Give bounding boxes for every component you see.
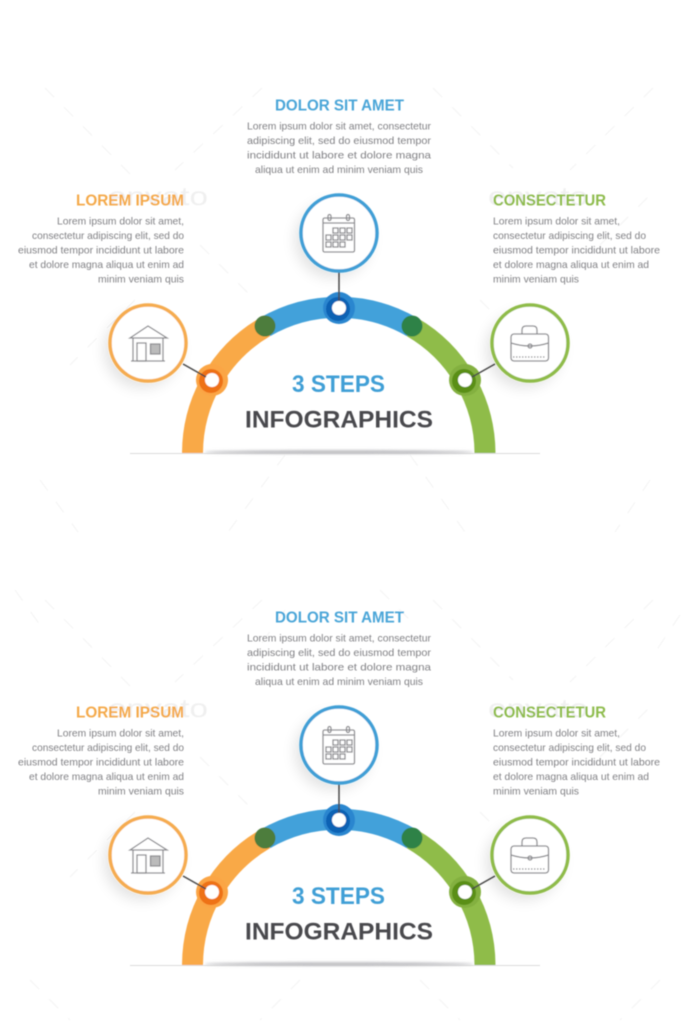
left text block: minim veniam quis (98, 786, 184, 798)
connector: right (472, 876, 495, 889)
center text block: incididunt ut labore et dolore magna (247, 662, 431, 674)
icon: briefcase (511, 326, 548, 361)
left text block: Lorem ipsum dolor sit amet, (57, 728, 184, 740)
center text block (247, 634, 432, 688)
right heading: consectetur: CONSECTETUR (493, 192, 606, 210)
connector: right (472, 364, 495, 377)
arc: orange segment (192, 327, 265, 453)
center text block: Lorem ipsum dolor sit amet, consectetur (247, 634, 432, 644)
icon: calendar (323, 726, 354, 764)
icon: house (130, 326, 167, 361)
right text block: consectetur adipiscing elit, sed do (493, 743, 646, 754)
watermark: right: envato (488, 693, 588, 723)
watermark: left: envato (108, 693, 208, 723)
icon: briefcase (511, 838, 548, 873)
node: blue (323, 292, 355, 324)
floor shadow line (130, 450, 540, 454)
circle: home (104, 817, 186, 900)
center title: infographics: INFOGRAPHICS (245, 918, 433, 946)
right text block (493, 216, 660, 286)
circle: briefcase (486, 817, 568, 900)
arc joint: left (254, 828, 276, 848)
right heading: consectetur: CONSECTETUR (493, 704, 606, 722)
left text block: eiusmod tempor incididunt ut labore (18, 758, 184, 768)
left text block: et dolore magna aliqua ut enim ad (29, 772, 184, 783)
circle: calendar (295, 195, 377, 278)
left text block: minim veniam quis (98, 274, 184, 286)
center heading: dolor sit amet: DOLOR SIT AMET (275, 98, 404, 114)
connector: center (338, 271, 340, 301)
center text block: adipiscing elit, sed do eiusmod tempor (247, 648, 432, 659)
right text block: eiusmod tempor incididunt ut labore (493, 758, 660, 768)
right text block: eiusmod tempor incididunt ut labore (493, 246, 660, 256)
connector: left (183, 364, 206, 377)
arc joint: right (402, 316, 422, 336)
watermark: right: envato (488, 181, 588, 211)
infographic: bottom copy (18, 610, 660, 966)
icon: house (130, 838, 167, 873)
circle: home (104, 305, 186, 388)
center text block: adipiscing elit, sed do eiusmod tempor (247, 136, 432, 147)
center title: 3 steps: 3 STEPS (292, 371, 385, 398)
left text block (18, 216, 184, 286)
left text block: consectetur adipiscing elit, sed do (32, 743, 184, 754)
right text block (493, 728, 660, 798)
left text block: et dolore magna aliqua ut enim ad (29, 260, 184, 271)
center text block (247, 122, 432, 176)
watermark: left: envato (108, 181, 208, 211)
left heading: lorem ipsum: LOREM IPSUM (76, 704, 184, 722)
left text block: eiusmod tempor incididunt ut labore (18, 246, 184, 256)
arc: blue segment (265, 819, 412, 839)
node: orange (196, 364, 228, 396)
right text block: consectetur adipiscing elit, sed do (493, 231, 646, 242)
left text block: Lorem ipsum dolor sit amet, (57, 216, 184, 228)
node: green (449, 876, 481, 908)
connector: center (338, 783, 340, 813)
center heading: dolor sit amet: DOLOR SIT AMET (275, 610, 404, 626)
right text block: Lorem ipsum dolor sit amet, (493, 216, 620, 228)
right text block: et dolore magna aliqua ut enim ad (493, 772, 649, 783)
center text block: aliqua ut enim ad minim veniam quis (255, 677, 423, 688)
center title: 3 steps: 3 STEPS (292, 883, 385, 910)
center title: infographics: INFOGRAPHICS (245, 406, 433, 434)
arc: green segment (412, 839, 485, 965)
left text block: consectetur adipiscing elit, sed do (32, 231, 184, 242)
center text block: incididunt ut labore et dolore magna (247, 150, 431, 162)
node: green (449, 364, 481, 396)
node: blue (323, 804, 355, 836)
arc: orange segment (192, 839, 265, 965)
right text block: Lorem ipsum dolor sit amet, (493, 728, 620, 740)
left text block (18, 728, 184, 798)
circle: calendar (295, 707, 377, 790)
arc joint: left (254, 316, 276, 336)
center text block: aliqua ut enim ad minim veniam quis (255, 165, 423, 176)
connector: left (183, 876, 206, 889)
icon: calendar (323, 214, 354, 252)
circle: briefcase (486, 305, 568, 388)
left heading: lorem ipsum: LOREM IPSUM (76, 192, 184, 210)
right text block: minim veniam quis (493, 274, 579, 286)
floor shadow line (130, 962, 540, 966)
node: orange (196, 876, 228, 908)
right text block: et dolore magna aliqua ut enim ad (493, 260, 649, 271)
arc: blue segment (265, 307, 412, 327)
center text block: Lorem ipsum dolor sit amet, consectetur (247, 122, 432, 132)
arc joint: right (402, 828, 422, 848)
right text block: minim veniam quis (493, 786, 579, 798)
infographic: top copy (18, 98, 660, 454)
arc: green segment (412, 327, 485, 453)
